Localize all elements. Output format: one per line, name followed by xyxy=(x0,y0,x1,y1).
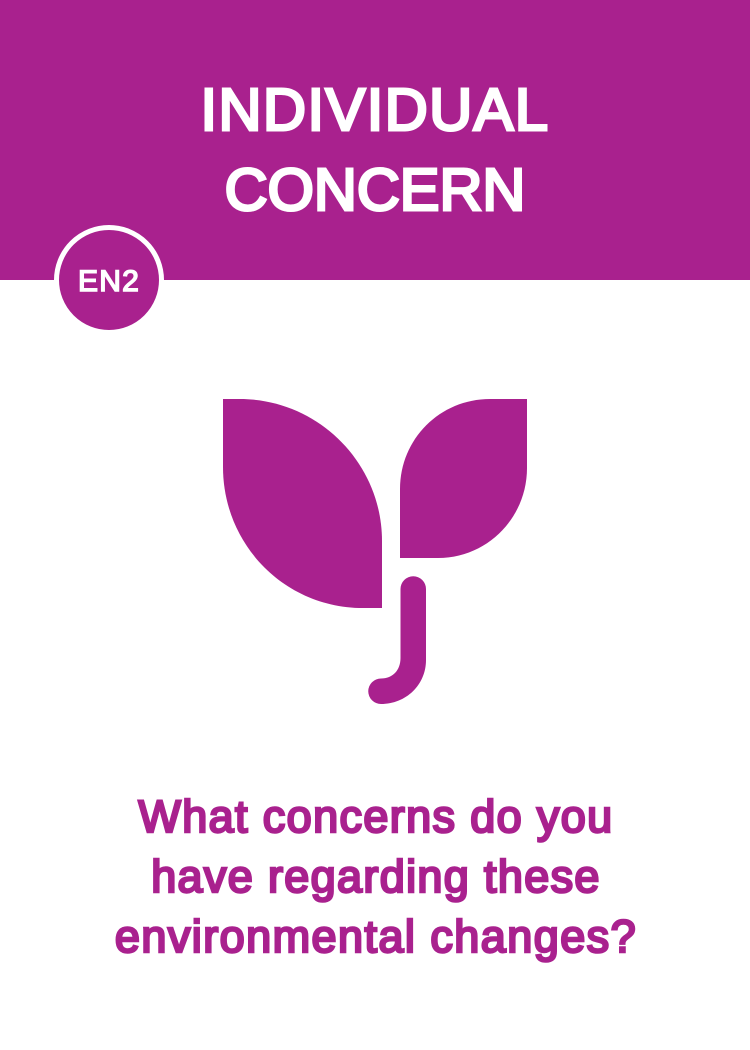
question text: have regarding these xyxy=(151,851,601,902)
header band xyxy=(0,0,750,280)
title xyxy=(201,76,549,223)
question text xyxy=(115,791,637,963)
title: CONCERN xyxy=(225,156,525,223)
question text: environmental changes? xyxy=(115,911,637,962)
badge: EN2: EN2 xyxy=(78,265,140,298)
title: INDIVIDUAL xyxy=(201,76,549,143)
question text: What concerns do you xyxy=(138,791,614,842)
badge: EN2 xyxy=(54,225,164,335)
